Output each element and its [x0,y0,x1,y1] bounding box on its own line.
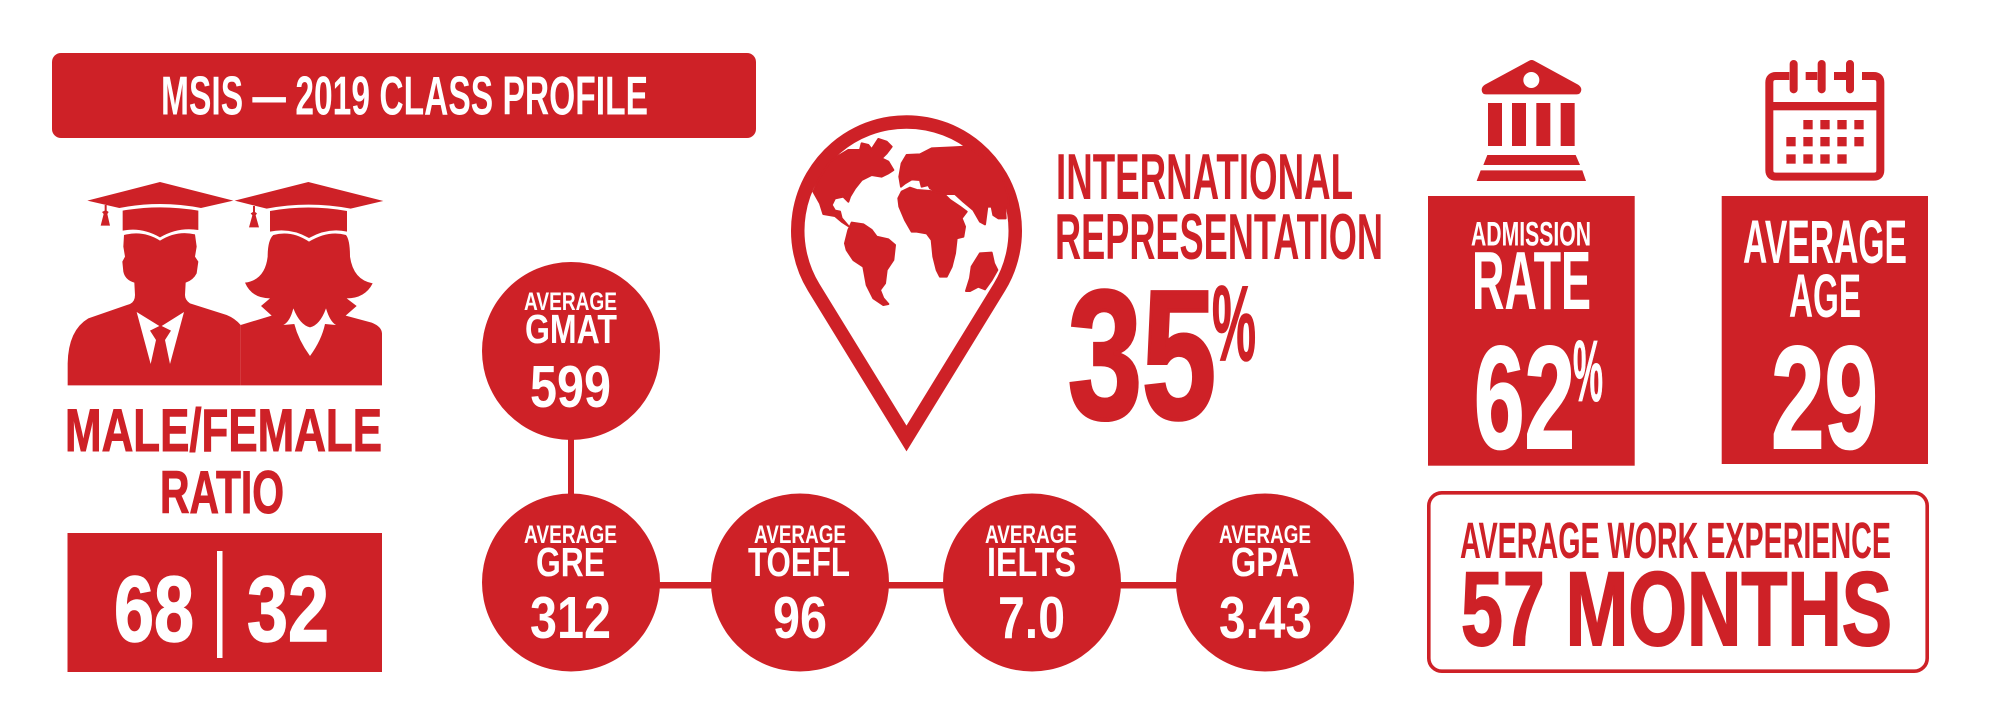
box background [1722,196,1928,464]
panel: admission rate [1428,60,1635,479]
circle: GMAT: 599 [530,354,611,420]
connectors [568,430,1200,588]
circle: IELTS: IELTS [987,539,1076,585]
circle: GMAT: GMAT [525,306,617,352]
title text: MSIS — 2019 CLASS PROFILE [161,64,648,126]
panel: international representation [798,122,1383,457]
circle: GRE: GRE [536,539,605,585]
outlined box [1429,493,1927,671]
divider [217,551,222,658]
circle: GRE: AVERAGE [524,521,617,549]
label: admission: ADMISSION [1471,216,1591,254]
value: 35: 35 [1068,252,1216,457]
icon: globe location pin [798,122,1015,438]
panel: title banner [52,53,756,138]
icon: institution building [1477,60,1586,181]
circle: GPA: GPA [1231,539,1299,585]
heading: male/female: MALE/FEMALE [65,397,382,464]
circle: GMAT [482,262,660,440]
label: rate: RATE [1472,234,1591,327]
circle: GRE: 312 [530,585,611,651]
heading: representation: REPRESENTATION [1055,200,1383,273]
panel: average age [1722,64,1928,479]
circle: TOEFL: 96 [773,585,827,651]
icon: male and female graduates [68,182,383,385]
banner background [52,53,756,138]
ratio box background [68,533,382,672]
panel: male/female ratio [65,182,383,672]
value: female 32: 32 [247,557,329,661]
circle: TOEFL [711,494,889,672]
circle: IELTS [943,494,1121,672]
circle: GPA: AVERAGE [1219,521,1311,549]
panel: test score network [482,262,1354,672]
value: 62: 62 [1474,316,1575,479]
circle: GMAT: AVERAGE [524,288,617,316]
value: male 68: 68 [114,557,194,661]
panel: international representation: % [1212,263,1256,383]
circle: GRE [482,494,660,672]
value: 29: 29 [1771,316,1878,479]
circle: TOEFL: AVERAGE [754,521,846,549]
panel: admission rate: % [1573,324,1603,420]
box background [1428,196,1635,466]
heading: ratio: RATIO [160,459,284,526]
panel: average work experience [1429,493,1927,671]
circle: IELTS: AVERAGE [985,521,1077,549]
circle: TOEFL: TOEFL [748,539,850,585]
circle: IELTS: 7.0 [998,585,1065,651]
circle: GPA: 3.43 [1219,585,1312,651]
circle: GPA [1176,494,1354,672]
label: age: AGE [1789,262,1861,330]
icon: calendar [1769,64,1880,177]
heading: international: INTERNATIONAL [1056,140,1353,213]
